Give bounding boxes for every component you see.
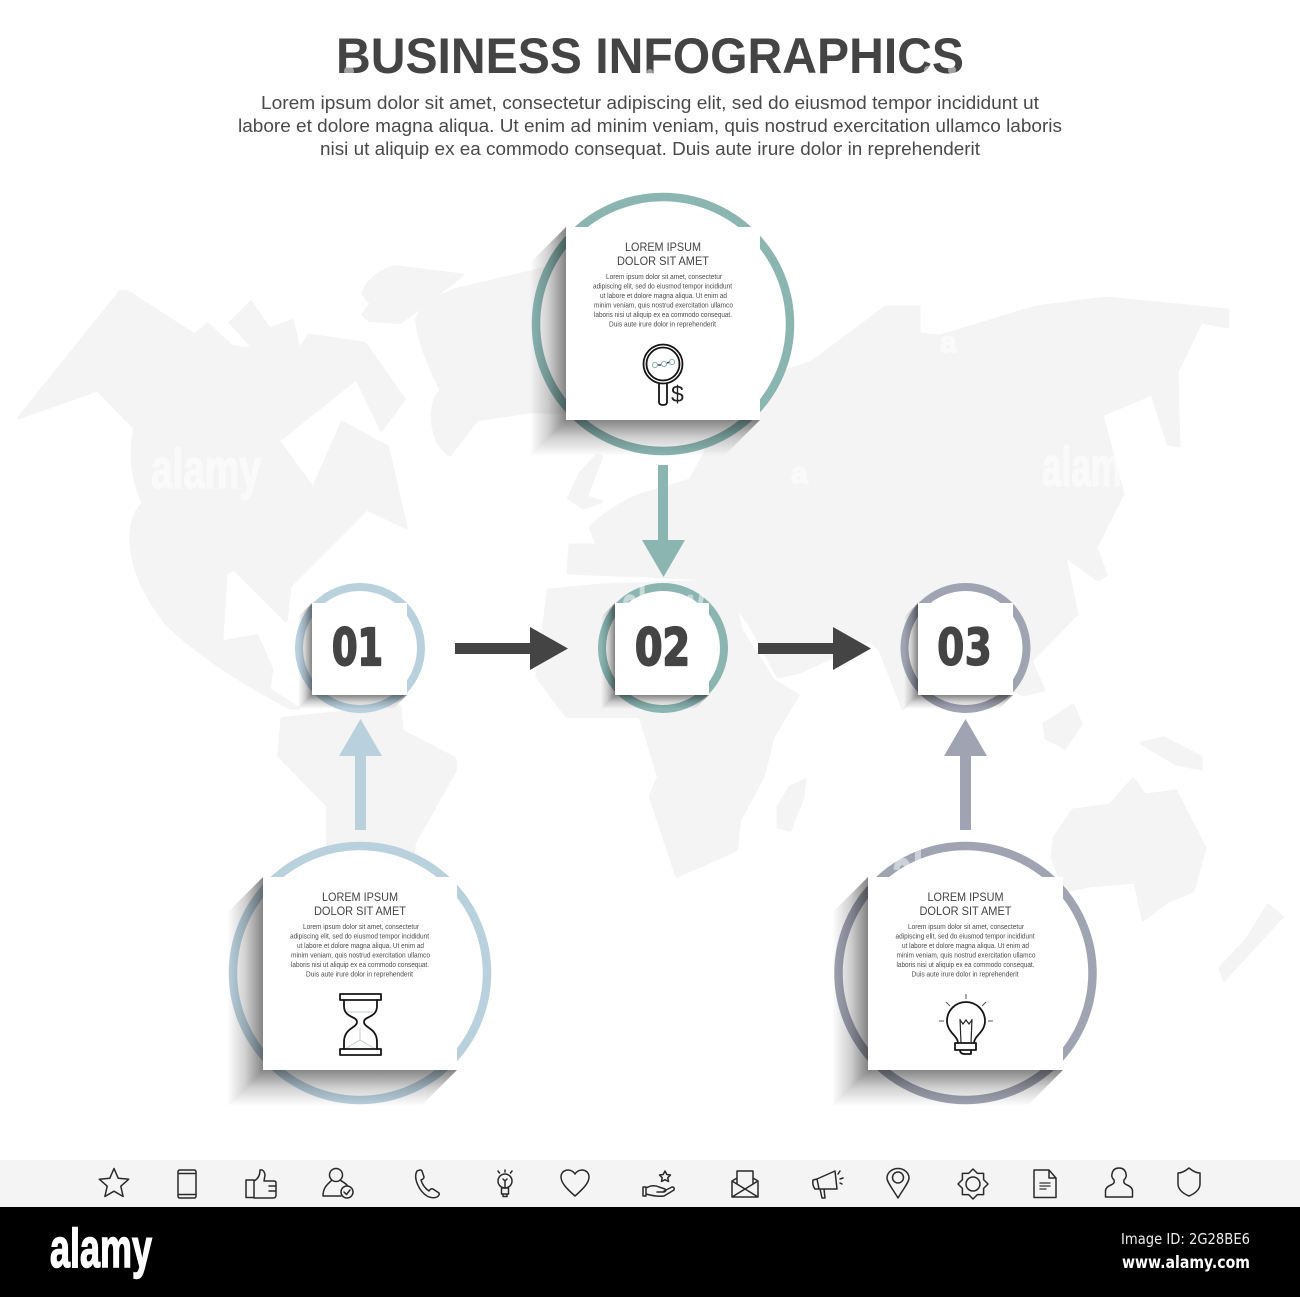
new zealand: [1220, 905, 1282, 980]
icon: megaphone: [813, 1171, 843, 1198]
watermark letter: a: [791, 457, 808, 490]
number: 01: [332, 619, 383, 678]
watermark right: alam: [1042, 435, 1122, 498]
card text: ut labore et dolore magna aliqua. Ut enim ad: [600, 293, 727, 300]
ring: [602, 587, 724, 709]
greenland: [363, 267, 462, 323]
icon: heart: [561, 1170, 589, 1196]
panel: step 01: [298, 587, 421, 709]
card: [263, 877, 457, 1070]
card text: [290, 890, 430, 978]
card text: Duis aute irure dolor in reprehenderit: [609, 322, 716, 328]
card: [312, 603, 407, 695]
icon: star: [99, 1168, 129, 1196]
card text: adipiscing elit, sed do eiusmod tempor incididunt: [290, 934, 429, 940]
north america: [19, 291, 406, 708]
ring: [904, 587, 1026, 709]
card text: Duis aute irure dolor in reprehenderit: [912, 972, 1019, 978]
card text: Lorem ipsum dolor sit amet, consectetur: [606, 274, 723, 281]
south america: [279, 706, 456, 876]
card text: adipiscing elit, sed do eiusmod tempor incididunt: [896, 934, 1035, 940]
card text: DOLOR SIT AMET: [920, 904, 1012, 918]
shadow: [298, 603, 407, 709]
icon: shield: [1178, 1168, 1200, 1196]
panel: left card: [227, 846, 487, 1106]
watermark left: alamy: [151, 437, 261, 500]
card text: laboris nisi ut aliquip ex ea commodo consequat.: [594, 312, 732, 319]
card: [868, 877, 1063, 1070]
card text: DOLOR SIT AMET: [617, 254, 710, 268]
ring watermark: alamy: [622, 577, 704, 633]
icon bar: [0, 1160, 1300, 1207]
arrow: 02 to 03: [758, 627, 871, 670]
world map: [19, 250, 1282, 980]
icon: small bulb: [498, 1170, 512, 1196]
image id: Image ID: 2G28BE6: [1121, 1230, 1250, 1248]
panel: step 02: [601, 577, 724, 709]
icon: phone handset: [416, 1170, 439, 1198]
panel: top card: [530, 197, 790, 456]
shadow: [227, 877, 457, 1106]
watermark letter: a: [940, 326, 957, 359]
card text: laboris nisi ut aliquip ex ea commodo consequat.: [896, 962, 1035, 969]
borneo: [1044, 705, 1081, 748]
card text: laboris nisi ut aliquip ex ea commodo consequat.: [291, 962, 429, 969]
card text: Duis aute irure dolor in reprehenderit: [306, 972, 413, 978]
iberia fragment: [568, 455, 602, 508]
ring: [536, 197, 790, 451]
ring: [838, 846, 1092, 1100]
shadow: [832, 877, 1063, 1106]
card text: [593, 240, 733, 328]
icon: hand with star: [643, 1171, 674, 1196]
ring: [233, 846, 487, 1100]
arrow: right card to 03: [944, 719, 987, 830]
icon: open envelope: [732, 1171, 758, 1197]
icon: hourglass: [340, 994, 381, 1055]
intro text: nisi ut aliquip ex ea commodo consequat. Duis aute irure dolor in reprehenderit: [320, 138, 980, 159]
panel: step 03: [904, 587, 1026, 709]
ring: [299, 587, 421, 709]
icon: thumbs up: [246, 1170, 276, 1198]
card text: LOREM IPSUM: [322, 890, 398, 904]
card text: ut labore et dolore magna aliqua. Ut enim ad: [297, 943, 424, 950]
intro text: [238, 92, 1062, 159]
map watermarks: [151, 326, 1122, 500]
bar background: [0, 1160, 1300, 1207]
shadow: [530, 227, 760, 456]
number: 03: [937, 619, 992, 678]
number: 02: [635, 619, 690, 678]
title watermark specks: [344, 66, 956, 76]
northern europe: [417, 250, 650, 455]
card text: minim veniam, quis nostrud exercitation ullamco: [594, 302, 733, 310]
card: [615, 603, 709, 695]
arrow: left card to 01: [339, 719, 382, 830]
arrow: 01 to 02: [455, 627, 568, 670]
icon: smartphone: [178, 1170, 196, 1198]
shadow: [904, 603, 1013, 709]
arrow: top to 02: [642, 465, 685, 577]
card text: Lorem ipsum dolor sit amet, consectetur: [908, 924, 1025, 931]
icon: magnifier with dollar: $: [671, 381, 684, 407]
footer band: [0, 1207, 1300, 1297]
icon: map pin: [887, 1168, 909, 1198]
ring watermark: alamy: [892, 834, 998, 908]
card text: DOLOR SIT AMET: [314, 904, 407, 918]
card text: LOREM IPSUM: [625, 240, 701, 254]
eurasia: [568, 298, 1228, 709]
card text: adipiscing elit, sed do eiusmod tempor incididunt: [593, 284, 732, 290]
card text: minim veniam, quis nostrud exercitation ullamco: [291, 952, 430, 960]
black background: [0, 1207, 1300, 1297]
card: [918, 603, 1013, 695]
website: www.alamy.com: [1122, 1253, 1250, 1272]
icon: user check: [323, 1168, 353, 1198]
intro text: Lorem ipsum dolor sit amet, consectetur adipiscing elit, sed do eiusmod tempor incididunt ut: [261, 92, 1039, 113]
icon: user: [1106, 1168, 1132, 1197]
panel: right card: [832, 834, 1092, 1106]
card: [566, 227, 760, 420]
indonesia: [1141, 738, 1201, 769]
australia: [1052, 779, 1205, 920]
card text: LOREM IPSUM: [928, 890, 1004, 904]
card text: minim veniam, quis nostrud exercitation ullamco: [896, 952, 1036, 960]
icon: gear: [958, 1169, 988, 1199]
icon: light bulb: [939, 994, 993, 1054]
card text: ut labore et dolore magna aliqua. Ut enim ad: [902, 943, 1029, 950]
madagascar: [778, 780, 805, 830]
alamy logo: alamy: [50, 1217, 152, 1279]
shadow: [601, 603, 709, 709]
card text: Lorem ipsum dolor sit amet, consectetur: [303, 924, 420, 931]
intro text: labore et dolore magna aliqua. Ut enim ad minim veniam, quis nostrud exercitation ullamco laboris: [238, 115, 1062, 136]
icon: magnifier with dollar: [644, 344, 684, 407]
title: BUSINESS INFOGRAPHICS: [336, 28, 964, 84]
africa: [537, 580, 798, 877]
card text: [896, 890, 1036, 978]
icon: document: [1034, 1170, 1056, 1198]
